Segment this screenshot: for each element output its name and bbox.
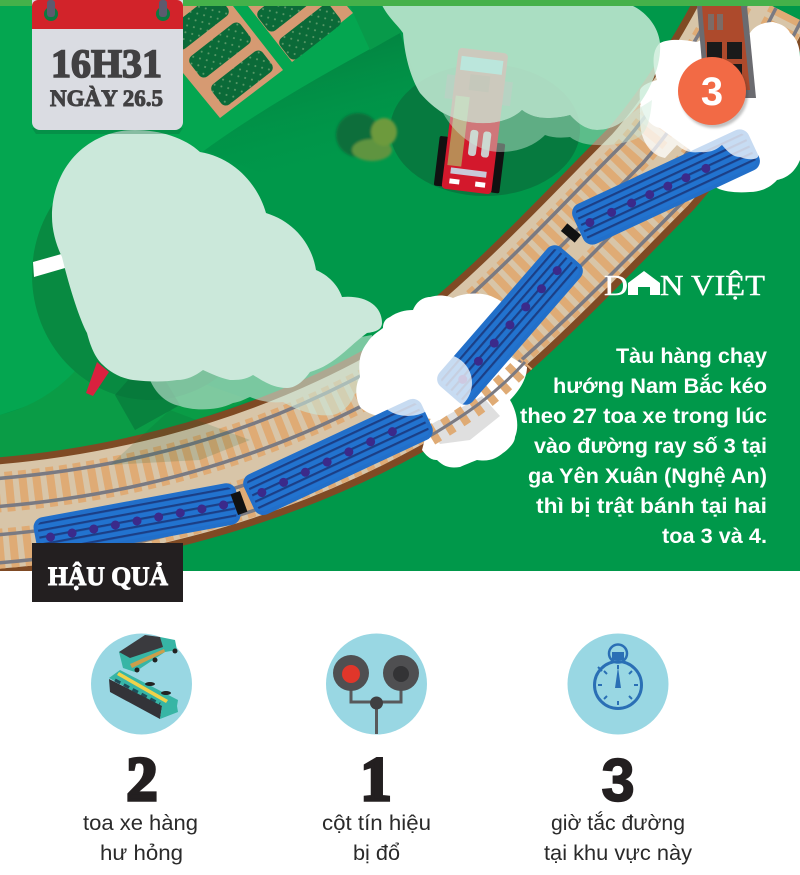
translucent smoke over train — [640, 105, 758, 160]
label line 2: bị đổ — [353, 841, 400, 865]
number: 2 — [126, 746, 158, 814]
train car 4 — [569, 126, 763, 248]
text block: description: toa 3 và 4. — [662, 524, 767, 548]
label: cột tín hiệu — [322, 811, 431, 835]
panel: green aerial scene — [0, 0, 800, 571]
text block: description — [520, 344, 767, 548]
icon: stopwatch — [568, 634, 668, 734]
label: giờ tắc đường — [551, 810, 685, 835]
number: 1 — [360, 746, 392, 814]
label: toa xe hàng — [83, 811, 198, 835]
translucent smoke over middle cars — [381, 354, 472, 416]
icon: badge number 3 — [678, 57, 748, 128]
top strip — [0, 0, 800, 6]
text: logo Dan Viet: D — [604, 270, 628, 302]
icon: damaged train — [91, 634, 192, 734]
label line 2: hư hỏng — [100, 841, 183, 865]
train car 1 — [34, 483, 240, 543]
farm plots — [183, 6, 353, 118]
icon: tree — [336, 113, 397, 161]
text block: description: thì bị trật bánh tại hai — [536, 494, 767, 518]
icon: signal — [326, 634, 427, 734]
large smoke cloud — [52, 130, 382, 415]
text block: description: ga Yên Xuân (Nghệ An) — [528, 464, 767, 488]
icon: badge number 3: 3 — [701, 70, 723, 114]
text: logo Dan Viet: N VIỆT — [660, 269, 765, 302]
label line 2: tại khu vực này — [544, 841, 692, 865]
icon: white bar — [33, 253, 65, 277]
middle white cloud base — [356, 294, 512, 420]
text: time: 16H31 — [51, 41, 162, 86]
train car 3 — [433, 241, 587, 409]
text: logo Dan Viet — [604, 269, 765, 302]
text block: description: theo 27 toa xe trong lúc — [520, 404, 767, 428]
text: date: NGÀY 26.5 — [50, 86, 163, 111]
train coupling — [231, 491, 247, 515]
train car 2 — [240, 396, 436, 518]
shadow on track — [110, 410, 250, 465]
railway track — [0, 0, 800, 564]
track over white cloud — [428, 362, 525, 444]
text block: description: vào đường ray số 3 tại — [534, 434, 767, 458]
heading: Hau qua — [32, 543, 183, 602]
stat: signal post — [322, 634, 431, 865]
top smoke cloud — [380, 0, 660, 152]
upper right white cloud — [640, 22, 800, 192]
text block: description: hướng Nam Bắc kéo — [553, 373, 767, 398]
text block: description: Tàu hàng chạy — [616, 344, 767, 368]
stat: traffic hours — [544, 634, 692, 865]
heading: Hau qua: HẬU QUẢ — [48, 562, 168, 591]
lower white cloud — [422, 350, 527, 467]
train coupling — [561, 223, 581, 243]
fire truck — [433, 47, 516, 195]
number: 3 — [601, 747, 635, 814]
calendar — [32, 0, 183, 134]
stat: damaged cars — [83, 634, 198, 865]
locomotive — [697, 6, 756, 98]
icon: red post — [86, 362, 109, 396]
